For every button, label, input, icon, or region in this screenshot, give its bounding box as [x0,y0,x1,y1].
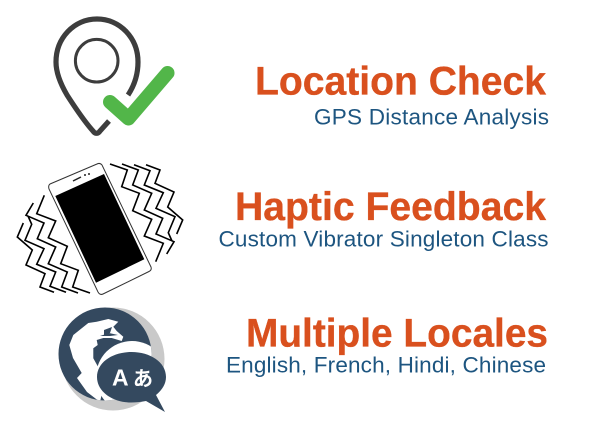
green check mark [110,73,168,118]
icon: location pin with check mark [56,19,168,133]
icon: globe with translation bubble: あ [133,368,153,390]
row 1 text [255,60,549,129]
globe disc [58,308,152,400]
icon: vibrating phone [17,163,183,294]
bubble glyphs: A [112,364,129,390]
subheading: Custom Vibrator Singleton Class: Custom Vibrator Singleton Class [218,227,548,252]
pin outline [56,19,138,133]
white halo around bubble [98,341,152,400]
grey crescent shadow [62,308,164,410]
row 3 text [226,312,548,377]
heading: Multiple Locales: Multiple Locales [246,312,548,356]
vibration zigzags right [110,164,183,262]
subheading: GPS Distance Analysis: GPS Distance Analysis [314,104,549,129]
phone speaker and camera [73,173,90,181]
globe white landmass [69,319,123,402]
icon: globe with translation bubble [58,308,168,413]
phone body [49,163,151,294]
vibration zigzags left [17,195,90,293]
pin inner circle [75,39,118,82]
row 2 text [218,185,548,252]
globe inland sea [100,327,118,336]
heading: Location Check: Location Check [255,60,547,104]
phone screen [55,174,144,283]
heading: Haptic Feedback: Haptic Feedback [235,185,547,229]
speech bubble [97,352,166,412]
subheading: English, French, Hindi, Chinese: English, French, Hindi, Chinese [226,352,546,377]
